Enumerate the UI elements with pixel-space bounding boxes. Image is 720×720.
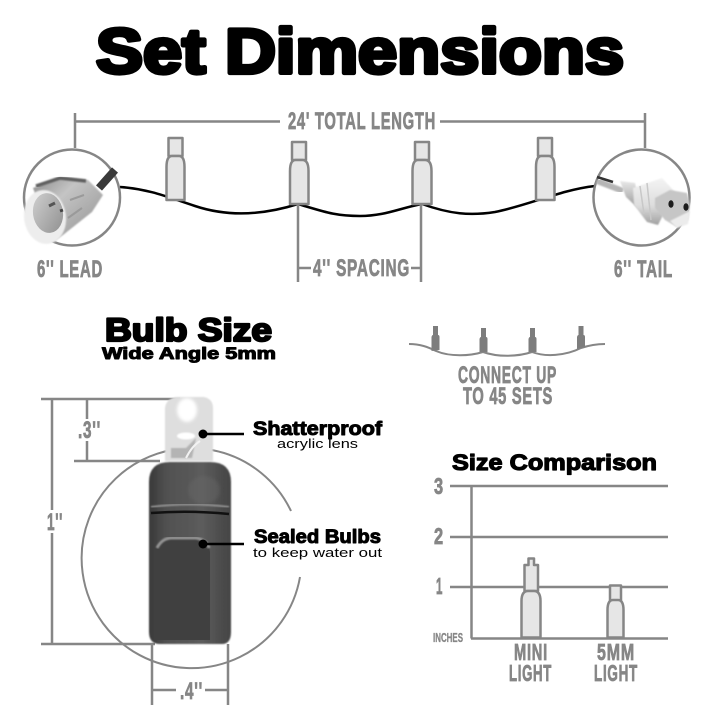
tail plug inset: [594, 150, 690, 246]
size comparison chart: INCHES: [433, 631, 463, 645]
spacing dimension: 4'' SPACING: [313, 255, 410, 282]
height dimensions: [41, 399, 180, 644]
bulb outline 1: [166, 138, 184, 200]
callout: sealed bulbs: Sealed Bulbs: [254, 527, 381, 548]
size comparison chart: 3: [434, 473, 444, 499]
size comparison chart: 1: [436, 573, 443, 599]
bulb size subheading: Wide Angle 5mm: [102, 345, 276, 363]
background circle: [82, 448, 300, 668]
connect up label: CONNECT UP: [458, 362, 557, 389]
size comparison chart: MINI: [514, 639, 548, 665]
tail label: 6'' TAIL: [614, 256, 673, 283]
lead plug inset: [20, 150, 120, 247]
connected sets icon: [409, 326, 605, 356]
bulb outline 3: [412, 142, 432, 204]
bulb outline 2: [290, 142, 308, 204]
connect up label: [458, 362, 557, 410]
spacing dimension: [298, 204, 421, 282]
large bulb photo: [149, 397, 231, 644]
width dimension: .4'': [180, 678, 203, 705]
bulb size heading: Bulb Size: [105, 312, 272, 348]
size comparison chart: LIGHT: [594, 660, 638, 686]
size comparison chart: 2: [434, 523, 444, 549]
callout: shatterproof lens: Shatterproof: [253, 419, 383, 440]
bulb outline 4: [536, 138, 554, 200]
mini light bulb: [522, 558, 540, 638]
width dimension: [152, 644, 228, 705]
size comparison chart: [433, 473, 668, 686]
height dimensions: 1'': [47, 509, 63, 536]
size comparison chart: LIGHT: [509, 660, 552, 686]
callout: sealed bulbs: [198, 527, 382, 560]
callout: shatterproof lens: [198, 419, 383, 451]
total length dimension: 24' TOTAL LENGTH: [288, 108, 436, 135]
callout: sealed bulbs: to keep water out: [253, 545, 382, 560]
total length dimension: [75, 108, 645, 148]
5mm light bulb: [608, 586, 624, 638]
size comparison chart: 5MM: [597, 639, 635, 665]
light string wire: [120, 186, 595, 216]
lead label: 6'' LEAD: [37, 256, 103, 283]
title: Set Dimensions: [96, 17, 624, 87]
size comparison heading: Size Comparison: [452, 450, 657, 475]
connect up label: TO 45 SETS: [463, 383, 553, 410]
height dimensions: .3'': [78, 417, 101, 444]
callout: shatterproof lens: acrylic lens: [277, 436, 359, 451]
